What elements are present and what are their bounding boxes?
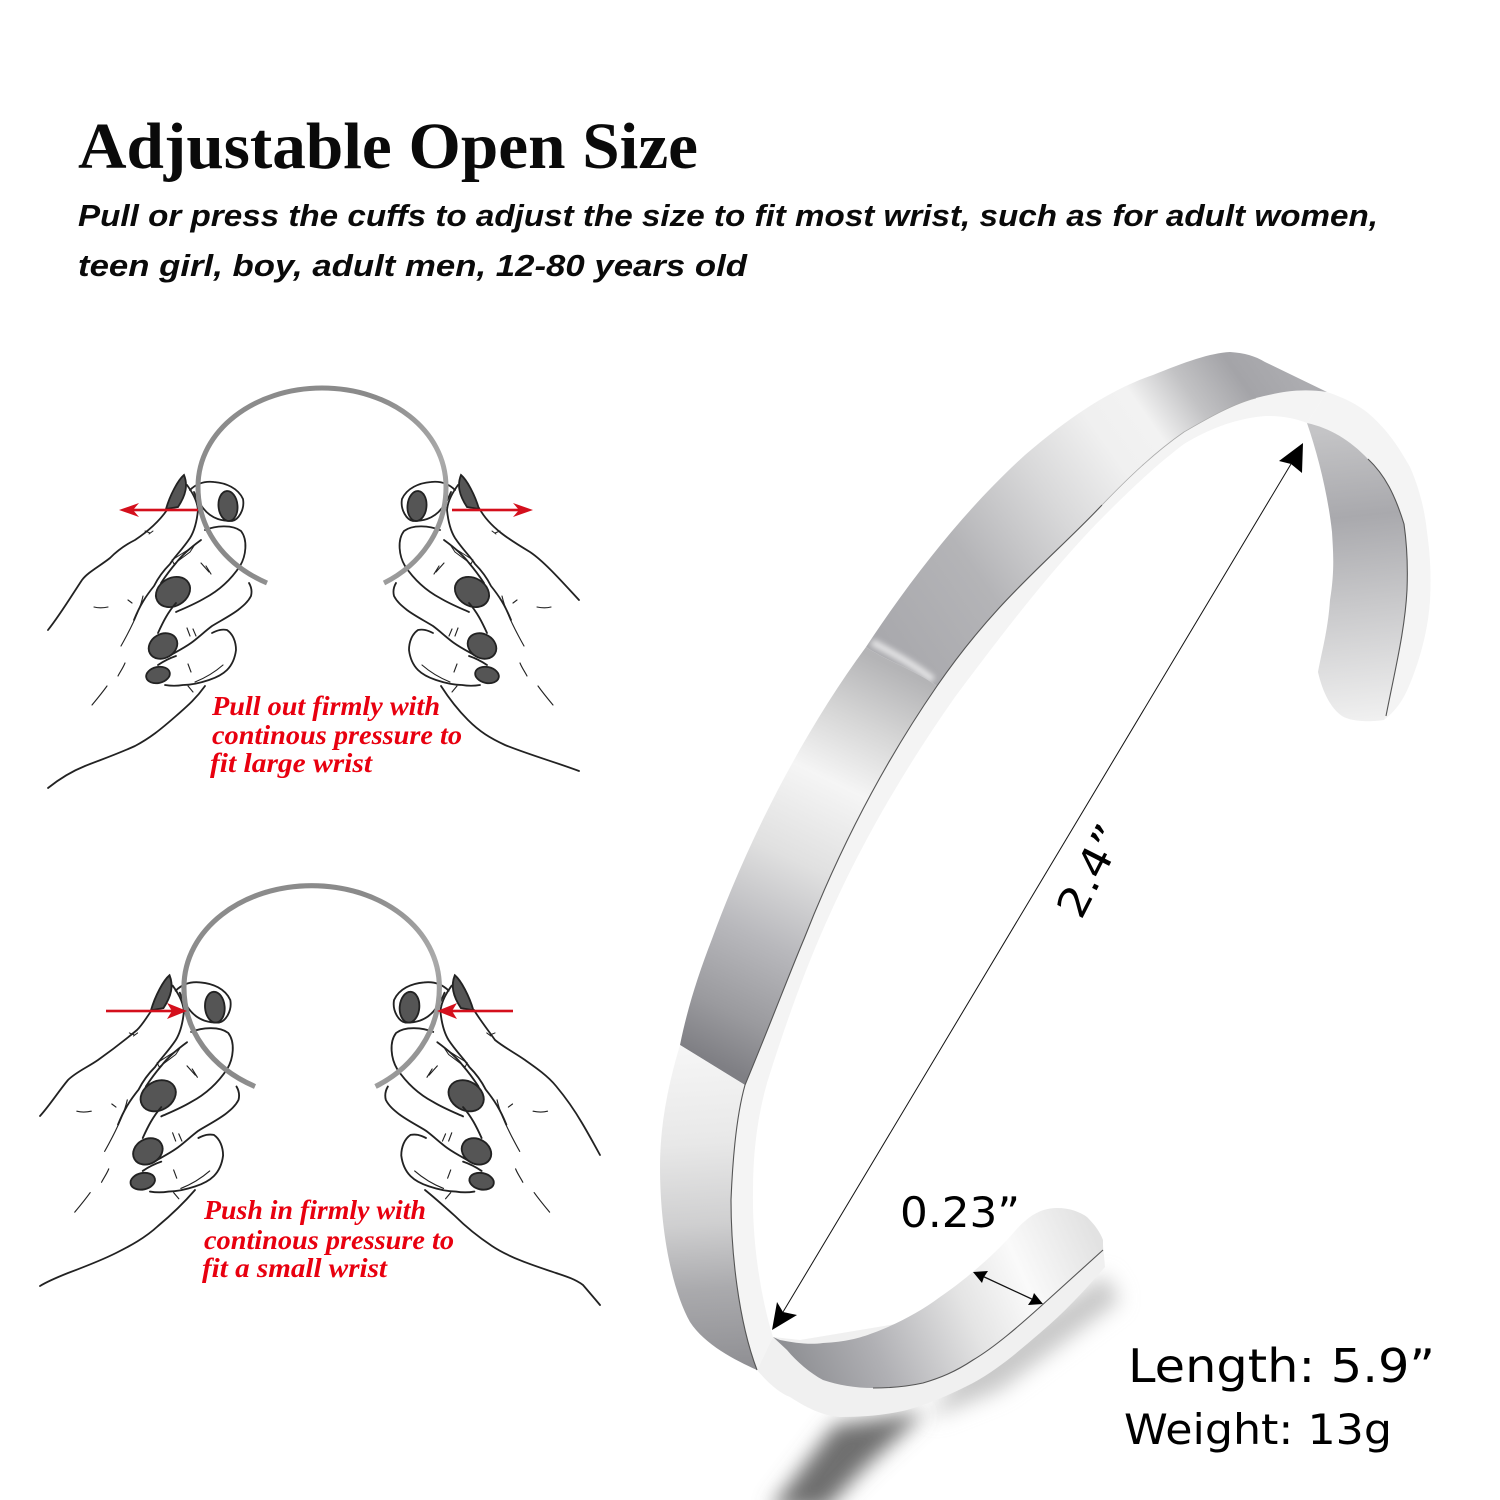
outer face: step highlight — [872, 642, 933, 680]
subtitle text: teen girl, boy, adult men, 12-80 years old — [78, 248, 748, 283]
outer face: middle section — [680, 647, 937, 1085]
red caption: fit a small wrist — [202, 1253, 389, 1283]
edge lines — [731, 398, 1407, 1388]
inner face: right end — [1307, 423, 1407, 721]
outer face: lower section — [660, 1045, 757, 1370]
label: width: 0.23” — [900, 1188, 1020, 1237]
outer face: top section — [866, 352, 1327, 686]
open bangle — [198, 388, 446, 583]
red caption: continous pressure to — [204, 1225, 454, 1255]
lower rim — [757, 1245, 1105, 1417]
right rim — [1307, 392, 1431, 720]
left hand outline — [48, 475, 252, 788]
red caption: Push in firmly with — [203, 1195, 426, 1225]
red caption: continous pressure to — [212, 720, 462, 750]
red caption — [210, 691, 462, 778]
red caption: Pull out firmly with — [211, 691, 440, 721]
outer hand lines — [40, 1010, 600, 1305]
title: Adjustable Open Size — [78, 110, 698, 183]
red caption — [202, 1195, 454, 1283]
label: diameter: 2.4” — [1047, 816, 1134, 926]
hands and bangle — [75, 886, 550, 1212]
label: weight: Weight: 13g — [1124, 1405, 1392, 1454]
subtitle text — [78, 198, 1378, 283]
arrow: width — [973, 1271, 1043, 1305]
red caption: fit large wrist — [210, 748, 374, 778]
silver cuff bracelet — [660, 352, 1431, 1500]
pull arrows — [119, 503, 533, 517]
arrow: diameter — [772, 443, 1303, 1330]
cast shadow — [770, 1275, 1120, 1500]
push arrows — [106, 1003, 513, 1019]
right hand outline — [393, 475, 579, 771]
inner face: lower end — [773, 1208, 1103, 1388]
top and left rim — [731, 390, 1327, 1370]
panel: pull out diagram — [48, 388, 579, 788]
panel: push in diagram — [40, 886, 600, 1305]
label: length: Length: 5.9” — [1128, 1339, 1435, 1393]
subtitle text: Pull or press the cuffs to adjust the size to fit most wrist, such as for adult women, — [78, 198, 1378, 233]
